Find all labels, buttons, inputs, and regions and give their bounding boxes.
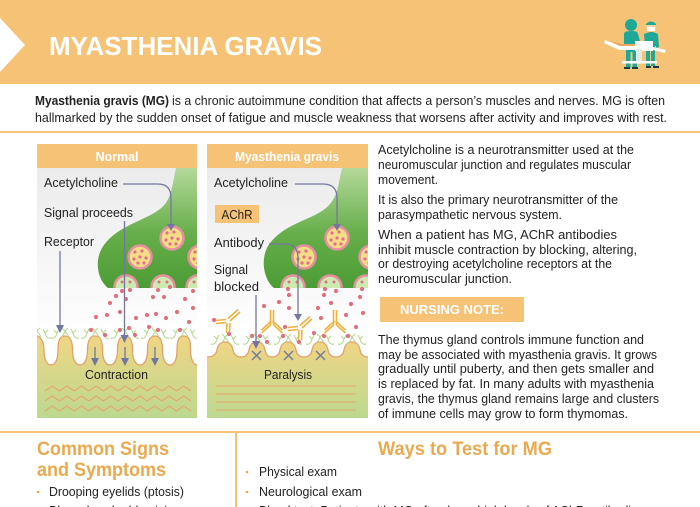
heading <box>37 439 169 481</box>
AChR tag: AChR <box>222 208 252 222</box>
section: ways to test for MG <box>246 439 644 507</box>
text block: acetylcholine explanation: It is also the primary neurotransmitter of the <box>378 193 618 207</box>
panel heading: Myasthenia gravis: Myasthenia gravis <box>235 150 339 164</box>
labels <box>44 176 148 382</box>
intro paragraph: is a chronic autoimmune condition that affects a person’s muscles and nerves. MG is often <box>172 93 665 108</box>
blocked markers <box>252 351 325 360</box>
text block: thymus note: may be associated with myasthenia gravis. It grows <box>378 348 657 362</box>
labels: Signal <box>214 263 248 277</box>
muscle fibre <box>37 336 197 418</box>
heading: Common Signs <box>37 439 169 460</box>
symptom list <box>37 485 184 507</box>
test list: Neurological exam <box>259 485 362 499</box>
intro paragraph: Myasthenia gravis (MG) <box>35 93 169 108</box>
header arrow notch <box>0 18 25 72</box>
title: MYASTHENIA GRAVIS <box>49 31 322 61</box>
labels: Paralysis <box>264 368 312 382</box>
text block: thymus note <box>378 333 659 421</box>
labels: Acetylcholine <box>214 176 288 190</box>
test list: Physical exam <box>259 465 337 479</box>
arrows <box>56 184 175 366</box>
text block: thymus note: gradually until puberty, and then gets smaller and <box>378 362 654 376</box>
test list <box>246 465 644 507</box>
nerve terminal with vesicles <box>98 168 197 288</box>
labels: Signal proceeds <box>44 206 133 220</box>
acetylcholine molecules <box>212 287 365 344</box>
icon: medical staff with patient on bed <box>604 19 666 69</box>
labels: blocked <box>214 280 259 294</box>
header banner <box>0 0 700 84</box>
contraction zigzag fibres <box>45 386 191 411</box>
panel heading: Normal: Normal <box>95 150 139 164</box>
section: common signs and symptoms <box>37 439 184 507</box>
text block: acetylcholine explanation: parasympathetic nervous system. <box>378 208 562 222</box>
panel heading: Myasthenia gravis <box>207 144 368 168</box>
text block: thymus note: The thymus gland controls immune function and <box>378 333 644 347</box>
text block: acetylcholine explanation: When a patient has MG, AChR antibodies <box>378 228 617 242</box>
muscle fibre <box>207 342 368 418</box>
nerve terminal with vesicles <box>264 168 368 288</box>
acetylcholine molecules <box>89 285 195 337</box>
text block: acetylcholine explanation: or destroying acetylcholine receptors at the <box>378 257 612 271</box>
panel: myasthenia gravis junction <box>207 144 382 418</box>
heading: Ways to Test for MG <box>378 439 552 460</box>
text block: acetylcholine explanation: neuromuscular junction and regulates muscular <box>378 158 631 172</box>
text block: thymus note: is replaced by fat. In many adults with myasthenia <box>378 377 654 391</box>
text block: acetylcholine explanation: neuromuscular junction. <box>378 272 512 286</box>
labels: Acetylcholine <box>44 176 118 190</box>
callout: nursing note: NURSING NOTE: <box>400 302 504 317</box>
text block: acetylcholine explanation: inhibit muscle contraction by blocking, altering, <box>378 243 637 257</box>
receptors <box>23 328 198 338</box>
text block: thymus note: of immune cells may grow to form thymomas. <box>378 407 628 421</box>
labels: Contraction <box>85 368 148 382</box>
intro paragraph: hallmarked by the sudden onset of fatigue and muscle weakness that worsens after activity and improves with rest. <box>35 110 667 125</box>
text block: acetylcholine explanation: movement. <box>378 173 438 187</box>
text block: acetylcholine explanation <box>378 143 637 286</box>
arrows <box>252 184 341 349</box>
text block: acetylcholine explanation: Acetylcholine is a neurotransmitter used at the <box>378 143 634 157</box>
antibodies <box>216 310 346 340</box>
labels: Receptor <box>44 235 94 249</box>
panel: normal neuromuscular junction <box>37 144 197 418</box>
labels: Antibody <box>214 236 265 250</box>
AChR tag <box>215 205 259 223</box>
text block: thymus note: gravis, the thymus gland remains large and clusters <box>378 392 659 406</box>
receptors <box>211 334 366 344</box>
labels <box>214 176 312 382</box>
intro paragraph <box>35 93 667 125</box>
heading: and Symptoms <box>37 460 166 481</box>
panel heading: Normal <box>37 144 197 168</box>
paralysis flat fibres <box>216 386 356 410</box>
symptom list: Drooping eyelids (ptosis) <box>49 485 184 499</box>
callout: nursing note <box>380 297 524 322</box>
